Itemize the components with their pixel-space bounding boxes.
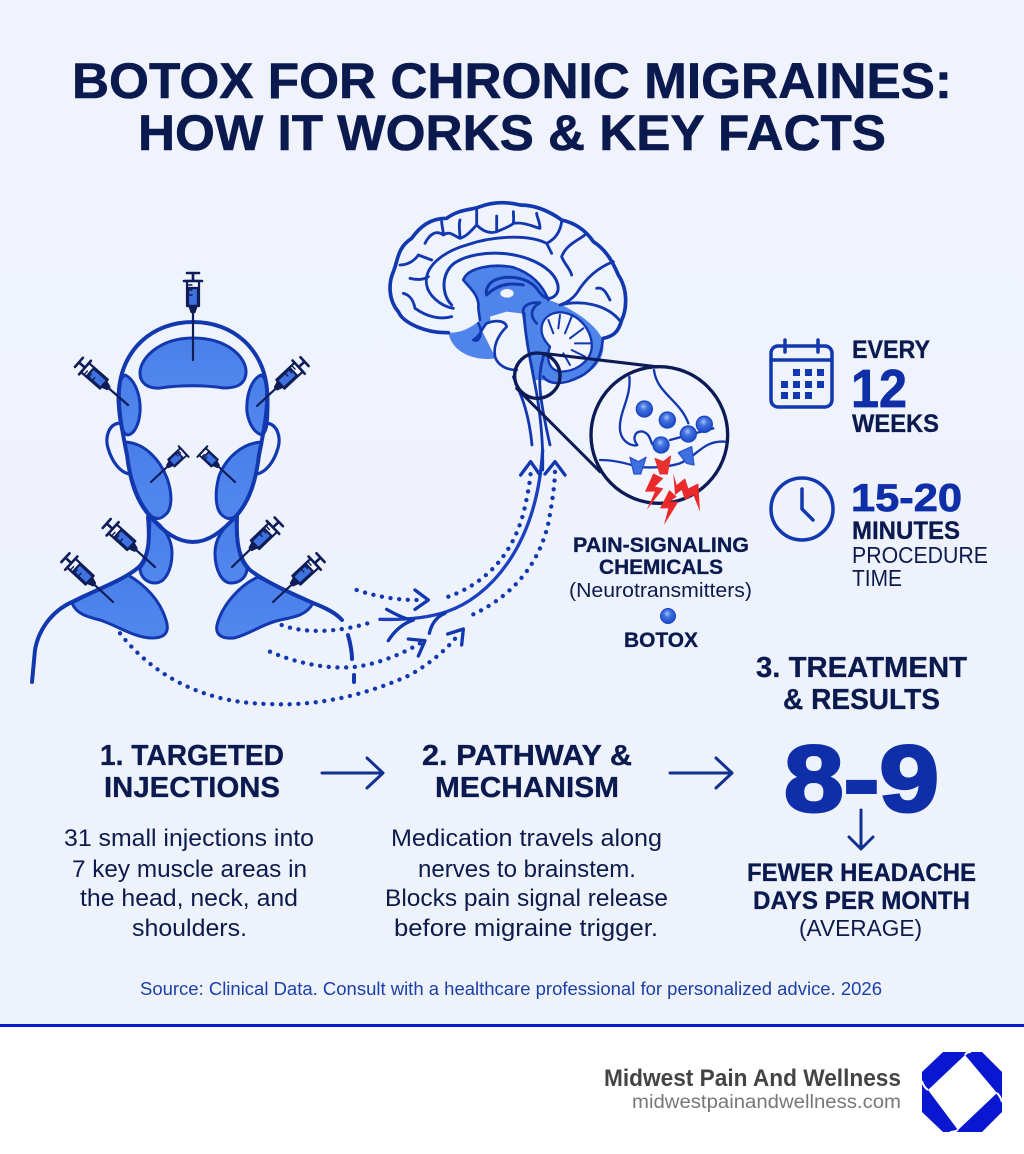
heading: pathway and mechanism <box>422 740 632 804</box>
text: fewer headache days <box>747 859 976 941</box>
text: fewer headache days: (AVERAGE) <box>799 915 922 941</box>
magnifier small circle <box>515 353 560 398</box>
stat: every 12 weeks: EVERY <box>852 336 930 364</box>
text: pathway description: before migraine trigger. <box>394 915 658 942</box>
injection needles and syringes <box>59 273 327 609</box>
neck and shoulder outline <box>32 517 149 682</box>
stat: every 12 weeks: WEEKS <box>852 410 939 438</box>
text: pathway description: nerves to brainstem. <box>418 856 636 883</box>
heading: pathway and mechanism: MECHANISM <box>435 772 619 804</box>
heading: treatment and results: 3. TREATMENT <box>756 652 967 684</box>
syringe: left shoulder <box>59 551 119 609</box>
brand name: Midwest Pain And Wellness <box>604 1065 901 1092</box>
dotted medication routes <box>120 470 555 704</box>
stat: 15-20 minutes procedure time <box>851 477 988 591</box>
synapse membrane <box>600 442 725 467</box>
nerve pathway arrows <box>120 450 565 704</box>
arrow: step 1 to step 2 <box>322 758 383 788</box>
text: fewer headache days: DAYS PER MONTH <box>753 887 970 915</box>
heading: treatment and results: & RESULTS <box>783 684 940 716</box>
thalamus and pons <box>473 321 507 357</box>
big number 8-9: 8-9 <box>784 726 939 831</box>
legend: pain signaling chemicals <box>569 534 752 652</box>
text: fewer headache days: FEWER HEADACHE <box>747 859 976 887</box>
icon: calendar <box>771 340 832 407</box>
brand url: midwestpainandwellness.com <box>632 1092 901 1113</box>
synapse terminal <box>620 370 713 445</box>
legend: pain signaling chemicals: CHEMICALS <box>599 556 723 579</box>
stat: 15-20 minutes procedure time: 15-20 <box>851 477 962 520</box>
syringe: forehead <box>184 273 202 360</box>
stat: 15-20 minutes procedure time: PROCEDURE <box>852 542 988 568</box>
head and shoulders illustration <box>32 273 354 682</box>
arrowheads <box>408 462 565 656</box>
text: targeted injections description: 7 key muscle areas in <box>72 856 307 883</box>
corpus callosum arches <box>444 253 558 305</box>
syringe: right cheek <box>197 446 240 487</box>
text: pathway description: Medication travels along <box>391 825 662 852</box>
title <box>72 53 952 161</box>
title: HOW IT WORKS & KEY FACTS <box>138 105 886 161</box>
legend: pain signaling chemicals: (Neurotransmitters) <box>569 580 752 602</box>
text: pathway description <box>385 825 668 942</box>
icon: clock <box>771 478 833 540</box>
syringe: right neck <box>226 515 285 573</box>
text: targeted injections description: the head, neck, and <box>80 885 298 912</box>
stat: every 12 weeks: 12 <box>851 359 907 419</box>
brain outline <box>390 203 626 338</box>
syringe: right shoulder <box>267 551 327 609</box>
brain fill regions <box>448 266 603 381</box>
arrow: down to result <box>849 810 873 849</box>
text: targeted injections description: shoulders. <box>132 915 247 942</box>
arrow: step 2 to step 3 <box>670 758 732 788</box>
title: BOTOX FOR CHRONIC MIGRAINES: <box>72 53 952 109</box>
stat: 15-20 minutes procedure time: MINUTES <box>852 517 960 545</box>
heading: targeted injections <box>100 740 284 804</box>
magnified synapse <box>591 367 728 525</box>
ventricle highlight <box>500 289 514 298</box>
icon: botox ball <box>660 608 676 624</box>
solid nerve pathway <box>380 450 543 641</box>
syringe: left neck <box>101 517 161 574</box>
muscle areas <box>72 338 313 638</box>
brainstem lines <box>513 313 550 470</box>
cerebellum <box>542 312 592 372</box>
magnifier connector lines <box>517 353 670 472</box>
brain folds <box>400 210 621 322</box>
syringe: left temple <box>73 356 134 412</box>
source note: Source: Clinical Data. Consult with a healthcare professional for personalized advice. 2026 <box>140 979 882 999</box>
icon: ears <box>107 423 279 474</box>
icon: logo <box>922 1052 1002 1132</box>
legend: pain signaling chemicals: PAIN-SIGNALING <box>573 534 749 557</box>
heading: targeted injections: INJECTIONS <box>104 772 280 804</box>
syringe: left cheek <box>146 446 189 487</box>
heading: treatment and results <box>756 652 967 716</box>
text: targeted injections description: 31 small injections into <box>64 825 314 852</box>
stat: every 12 weeks <box>851 336 939 438</box>
stat: 15-20 minutes procedure time: TIME <box>852 565 902 591</box>
legend: pain signaling chemicals: BOTOX <box>624 629 698 652</box>
heading: targeted injections: 1. TARGETED <box>100 740 284 772</box>
receptors <box>630 457 646 474</box>
footer band <box>0 1024 1024 1154</box>
brain illustration <box>390 203 728 525</box>
heading: pathway and mechanism: 2. PATHWAY & <box>422 740 632 772</box>
pain lightning bolts <box>645 473 700 525</box>
text: pathway description: Blocks pain signal release <box>385 885 668 912</box>
syringe: right temple <box>251 355 311 413</box>
head outline <box>119 322 267 542</box>
neurotransmitter vesicles <box>636 401 712 453</box>
text: targeted injections description <box>64 825 314 942</box>
